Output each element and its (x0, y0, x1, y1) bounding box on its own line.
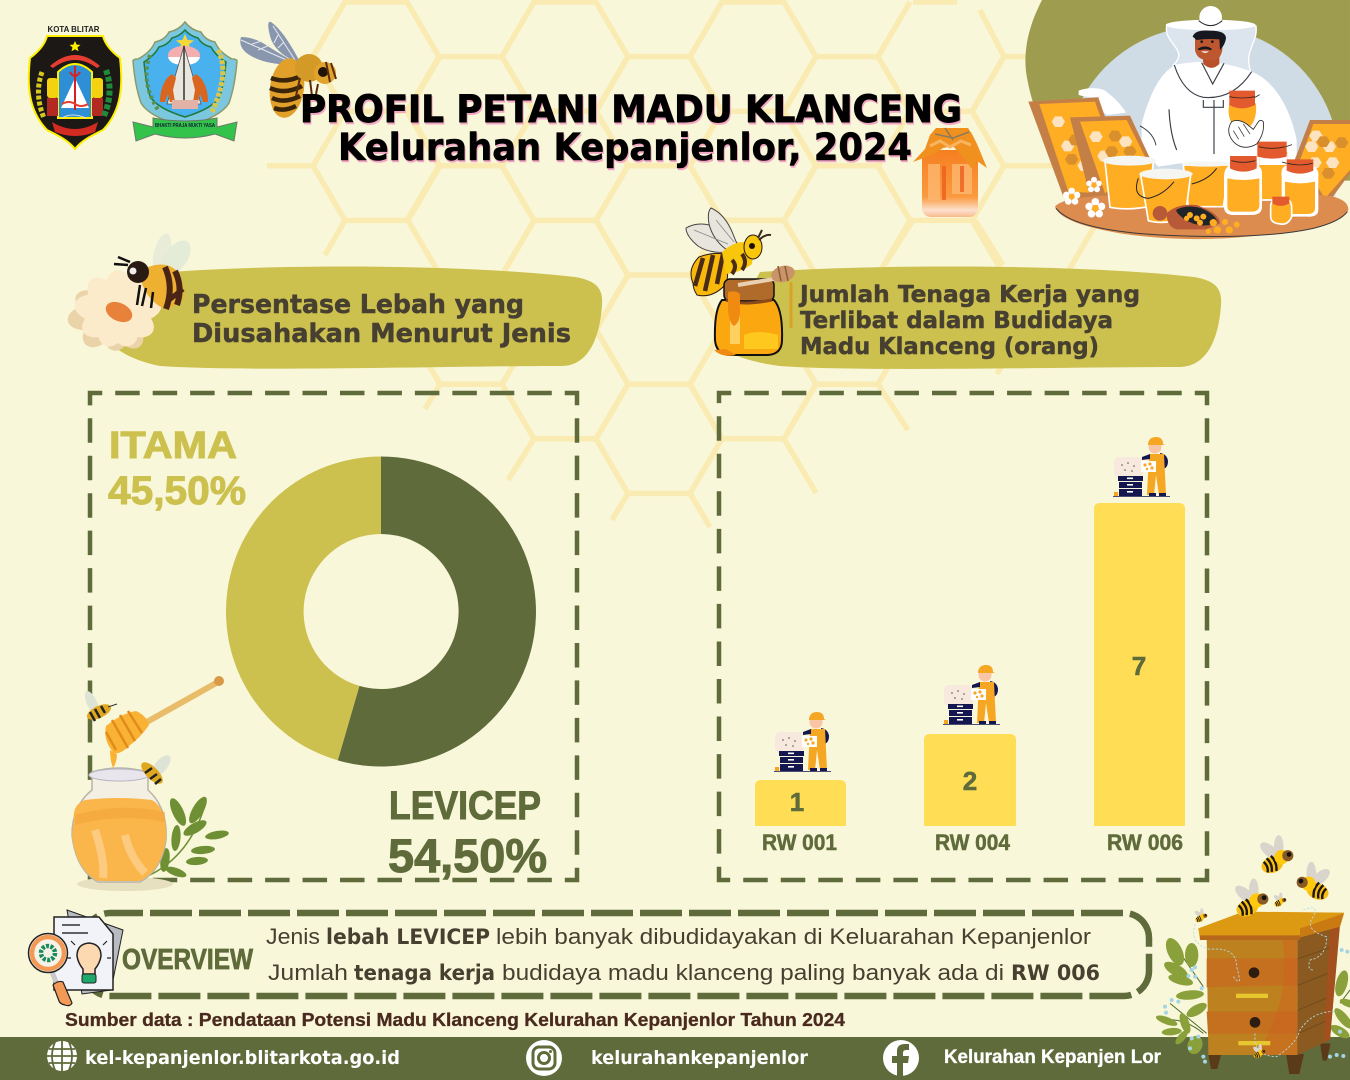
bar: RW 004: RW 004 (935, 830, 1011, 855)
label: ITAMA (108, 425, 246, 513)
label: LEVICEP: LEVICEP (389, 784, 541, 828)
panel: donut chart frame (90, 393, 577, 880)
hive side (1297, 925, 1340, 1055)
bar: RW 006: 7 (1132, 651, 1146, 681)
footer bar (0, 1037, 1350, 1080)
icon: bee on flower (114, 232, 196, 310)
title (300, 88, 962, 169)
icon: honey jar with dipper (714, 263, 797, 356)
jars (1258, 148, 1288, 200)
source note: Sumber data : Pendataan Potensi Madu Klanceng Kelurahan Kepanjenlor Tahun 2024 (65, 1009, 846, 1030)
donut slice: LEVICEP (338, 456, 536, 766)
illustration: beehive with bees and plants (1155, 831, 1350, 1074)
bees (1253, 831, 1297, 876)
left hand (1079, 88, 1126, 115)
icon: beekeeper worker RW 004 (943, 665, 1000, 724)
label: ITAMA: ITAMA (109, 425, 237, 467)
blue circle (1066, 27, 1339, 197)
logo: Kelurahan emblem (133, 22, 237, 141)
label: LEVICEP: 54,50% (388, 829, 547, 882)
flowers (1063, 188, 1080, 205)
banner: heading right (686, 208, 1221, 369)
veil (1166, 26, 1256, 72)
jar in hand (1229, 103, 1256, 128)
title: Kelurahan Kepanjenlor, 2024 (338, 126, 912, 169)
donut slice: ITAMA (226, 456, 381, 760)
overview text: lebih banyak dibudidayakan di Keluarahan Kepanjenlor (496, 924, 1092, 949)
buckets (1183, 165, 1230, 207)
banner: heading left: Diusahakan Menurut Jenis (192, 319, 571, 349)
table (1055, 195, 1348, 239)
hive front (1207, 937, 1297, 1055)
banner: heading right: Terlibat dalam Budidaya (800, 306, 1113, 334)
overview text: Jumlah (268, 960, 348, 985)
hive legs (1208, 1043, 1331, 1074)
icon: flower (66, 269, 164, 354)
honeycomb background pattern (267, 2, 1098, 527)
frame left (1028, 97, 1120, 200)
small bee (82, 689, 117, 723)
banner: heading right: Madu Klanceng (orang) (800, 332, 1099, 360)
foliage (1155, 935, 1350, 1056)
dipper (145, 682, 218, 723)
icon: beekeeper worker RW 006 (1113, 437, 1170, 496)
website: kel-kepanjenlor.blitarkota.go.id (85, 1047, 400, 1069)
jar shadow (77, 877, 173, 891)
body (1142, 62, 1297, 167)
overview text: Jenis (266, 924, 320, 949)
leaves (150, 794, 230, 880)
overview text: budidaya madu klanceng paling banyak ada di (502, 960, 1004, 985)
bar: RW 004: 2 (963, 766, 977, 796)
frame middle (1070, 116, 1150, 198)
frame right (1293, 120, 1350, 205)
icon: beekeeper worker RW 001 (774, 712, 831, 772)
bar: RW 001 (755, 780, 846, 855)
jar (72, 768, 166, 882)
overview text: RW 006 (1011, 961, 1100, 986)
logo: Kelurahan emblem: BHAKTI PRAJA MUKTI YASA (155, 123, 215, 129)
foliage stems (1160, 943, 1350, 1033)
heading text: Persentase Lebah yang (192, 290, 524, 320)
title: PROFIL PETANI MADU KLANCENG (300, 88, 962, 131)
donut chart (226, 456, 536, 766)
small bee on jar (138, 752, 174, 787)
panel: overview box (85, 913, 1149, 996)
bar chart (755, 437, 1185, 855)
logo: Kota Blitar emblem (29, 24, 121, 149)
logo: Kota Blitar emblem: KOTA BLITAR (48, 24, 100, 34)
icon: honey jar with dipper and bees (72, 676, 230, 891)
hive holes and slots (1249, 967, 1259, 978)
heading text: Jumlah Tenaga Kerja yang (798, 280, 1140, 308)
icon: bee beside title (240, 22, 336, 120)
label: LEVICEP (388, 784, 547, 882)
flight trails (1194, 908, 1337, 1057)
neck and face (1203, 55, 1219, 68)
panel: bar chart frame (719, 393, 1207, 880)
hat (1166, 20, 1256, 30)
icon: instagram (526, 1040, 562, 1076)
bar: RW 001: 1 (790, 787, 804, 817)
hive roof (1198, 912, 1344, 940)
overview text (266, 924, 1100, 986)
overview text: lebah LEVICEP (326, 925, 490, 950)
instagram handle: kelurahankepanjenlor (591, 1047, 809, 1069)
icon: bee on jar (686, 208, 771, 296)
bar: RW 004 (924, 734, 1016, 855)
banner: heading left (66, 232, 602, 369)
icon: overview document with magnifier and bulb (28, 910, 123, 1006)
bar: RW 001: RW 001 (762, 830, 837, 855)
scoop (1153, 206, 1167, 221)
overview label: OVERVIEW (122, 944, 254, 976)
bar: RW 006: RW 006 (1107, 830, 1183, 855)
label: ITAMA: 45,50% (108, 469, 246, 513)
facebook page: Kelurahan Kepanjen Lor (944, 1047, 1162, 1068)
overview text: tenaga kerja (354, 961, 495, 986)
icon: facebook (883, 1040, 919, 1076)
illustration: beekeeper with honey jars (1025, 0, 1350, 239)
background blob (1025, 0, 1350, 181)
icon: watercolor honey jar (913, 128, 987, 217)
bar: RW 006 (1094, 503, 1185, 855)
icon: globe (47, 1041, 77, 1071)
